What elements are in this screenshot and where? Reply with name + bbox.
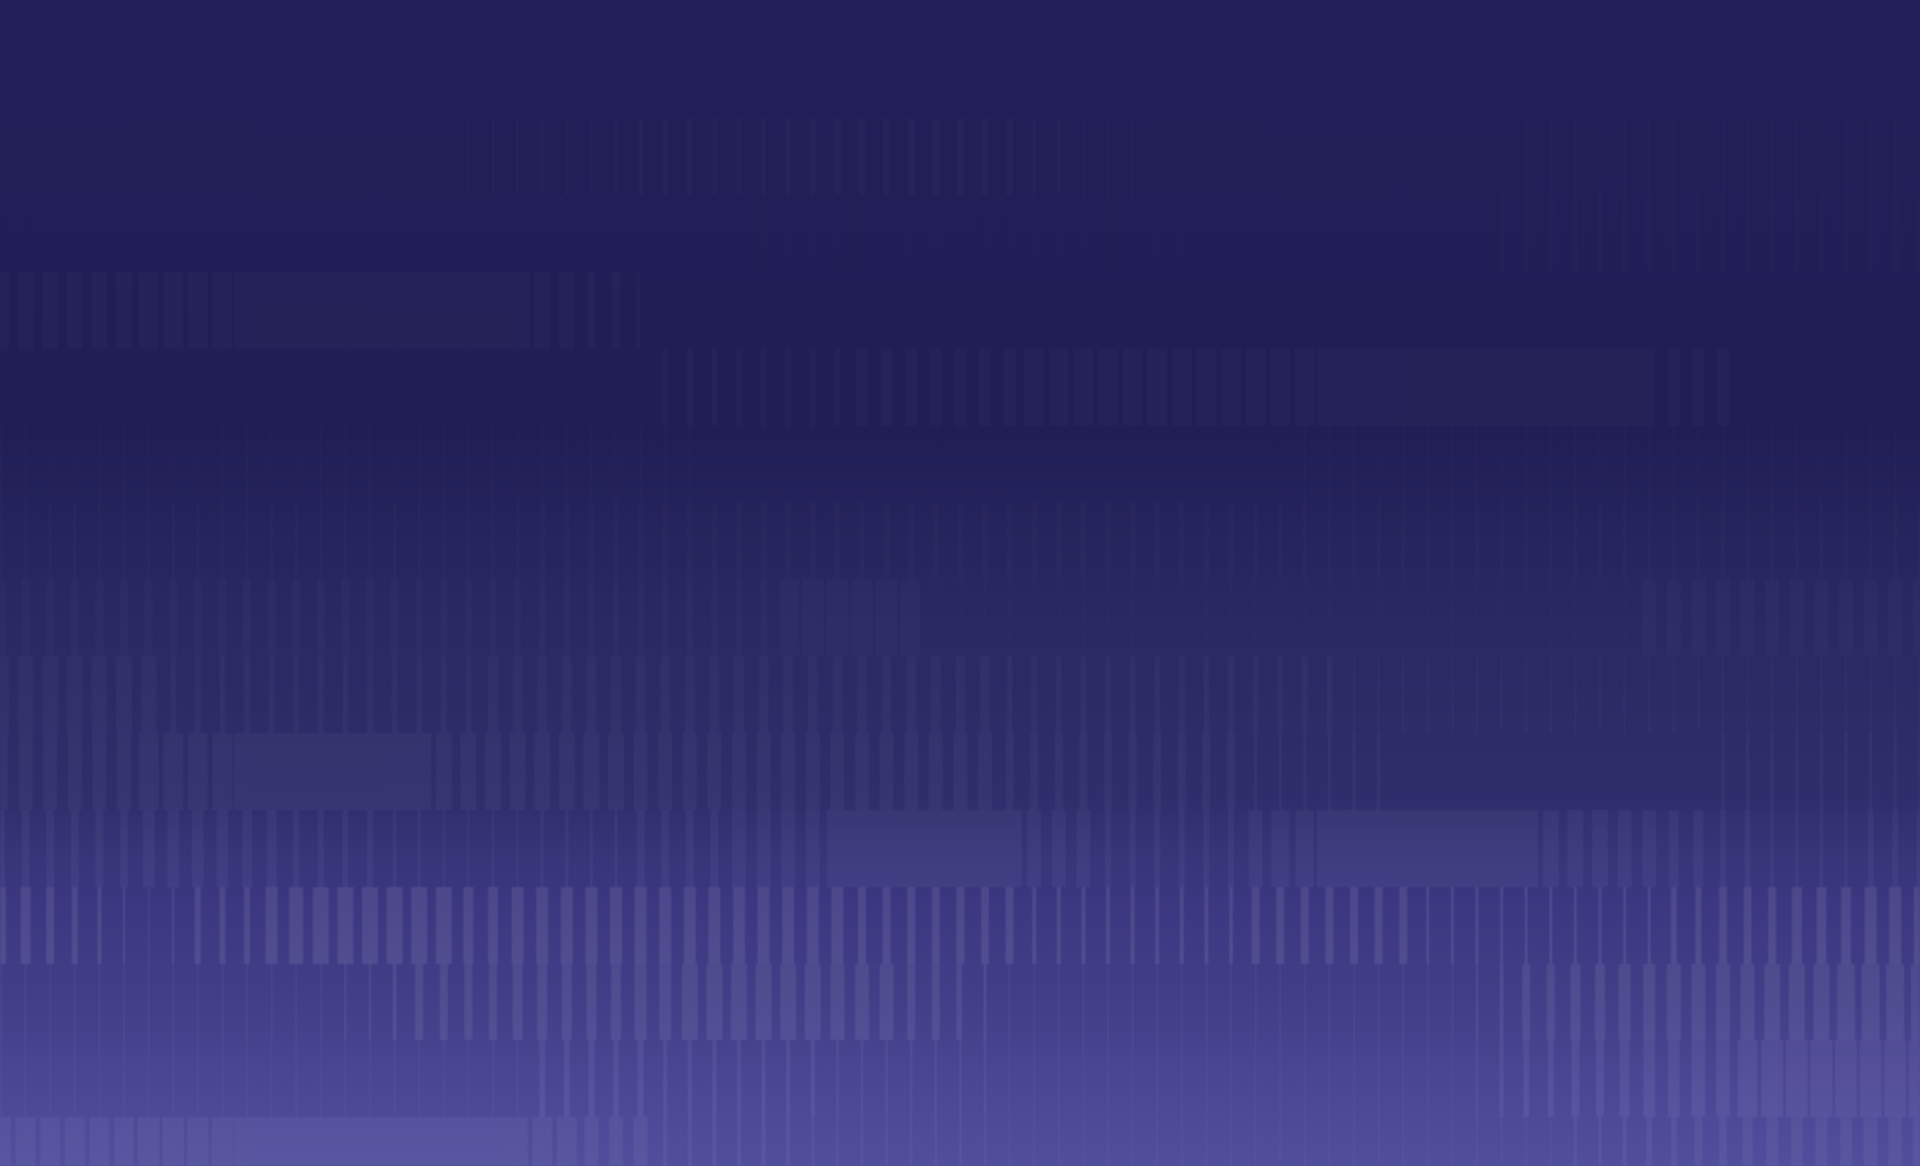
band 9: left solid block [0, 733, 1920, 810]
band 5: thin lines [0, 426, 1920, 502]
band 13: thin lines with wide bars at right [0, 1040, 1920, 1117]
band 6: faint bars [0, 502, 1920, 579]
band 3: left solid block [0, 272, 640, 349]
band 8: medium bars [0, 656, 1920, 733]
band 1: faint bars upper middle [465, 118, 1920, 195]
band 4: right solid block [0, 349, 1735, 426]
band 10: two solid blocks [0, 810, 1920, 887]
band 14: bottom solid block [0, 1117, 1920, 1166]
band 11: bright bars [0, 887, 1920, 964]
band 7: medium bars [0, 579, 1920, 656]
band 2: very faint lines [0, 195, 1920, 272]
band 12: widening bars [0, 964, 1920, 1040]
